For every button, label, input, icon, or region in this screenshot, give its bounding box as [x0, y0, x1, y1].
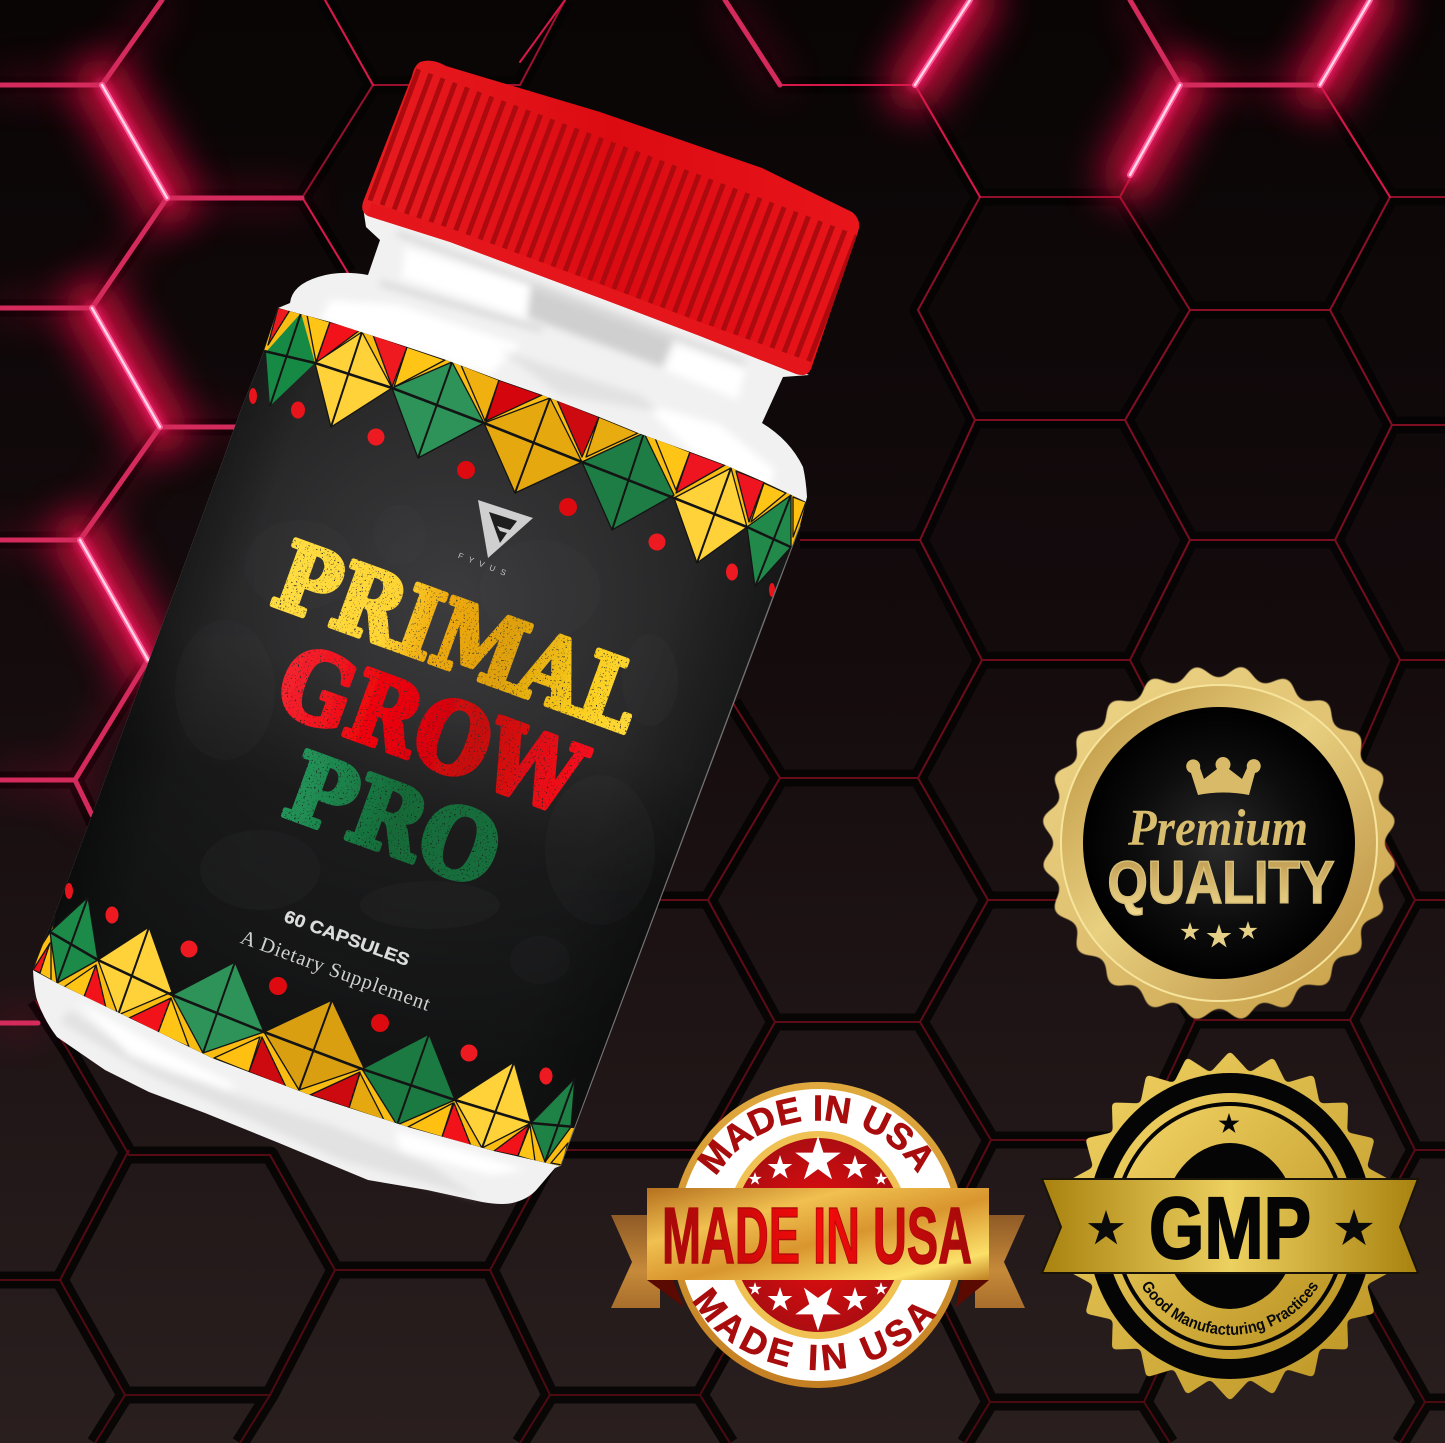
capsule count: 60 CAPSULES [282, 906, 412, 970]
black label [33, 308, 806, 1166]
toothed gold seal [1063, 1051, 1397, 1401]
product title [261, 521, 655, 910]
black center [1083, 707, 1355, 979]
red screw cap [362, 61, 859, 376]
three stars [1180, 921, 1258, 948]
label right edge sheen [560, 525, 800, 1166]
black centre [1162, 1143, 1298, 1309]
supplement descriptor: A Dietary Supplement [238, 927, 433, 1016]
brand logo [457, 500, 533, 580]
black outer ring [1087, 1073, 1373, 1379]
seal arc text: MADE IN USA [692, 1286, 937, 1370]
gold ring [1061, 685, 1377, 1001]
seal arc text: MADE IN USA [696, 1095, 932, 1175]
Premium script: Premium [1127, 800, 1308, 857]
good manufacturing practices: Good Manufacturing Practices [1142, 1282, 1318, 1336]
brand logo: FYVUS [457, 551, 513, 580]
gold ring [1105, 1093, 1355, 1359]
badge: gmp [1040, 1052, 1420, 1400]
ribbon stars [1088, 1209, 1373, 1245]
round seal [671, 1082, 965, 1388]
bottle body white plastic [33, 190, 809, 1204]
GMP text: GMP [1149, 1180, 1311, 1277]
ribbon tails [611, 1215, 1025, 1308]
seal arc text [692, 1095, 937, 1370]
product bottle [0, 61, 859, 1204]
badge: made in usa [611, 1082, 1025, 1388]
ribbon text: MADE IN USA [662, 1191, 972, 1280]
bottle shoulder and neck shading [60, 233, 775, 1198]
red dots [65, 388, 775, 1084]
bottom decorative band [33, 897, 575, 1166]
top star [1219, 1113, 1239, 1133]
icon: crown [1186, 757, 1261, 795]
front ribbon [647, 1188, 989, 1280]
seal stars [748, 1136, 888, 1331]
neon glow lines [0, 0, 1390, 1023]
ribbon [1042, 1179, 1418, 1273]
top decorative band [264, 308, 806, 587]
faint label ornament [175, 505, 678, 984]
badge: premium quality [1014, 638, 1424, 1048]
scalloped gold seal [1014, 638, 1424, 1048]
PRIMAL: PRIMAL [261, 521, 655, 755]
GROW: GROW [264, 624, 598, 838]
QUALITY: QUALITY [1108, 849, 1334, 916]
PRO: PRO [272, 732, 514, 910]
